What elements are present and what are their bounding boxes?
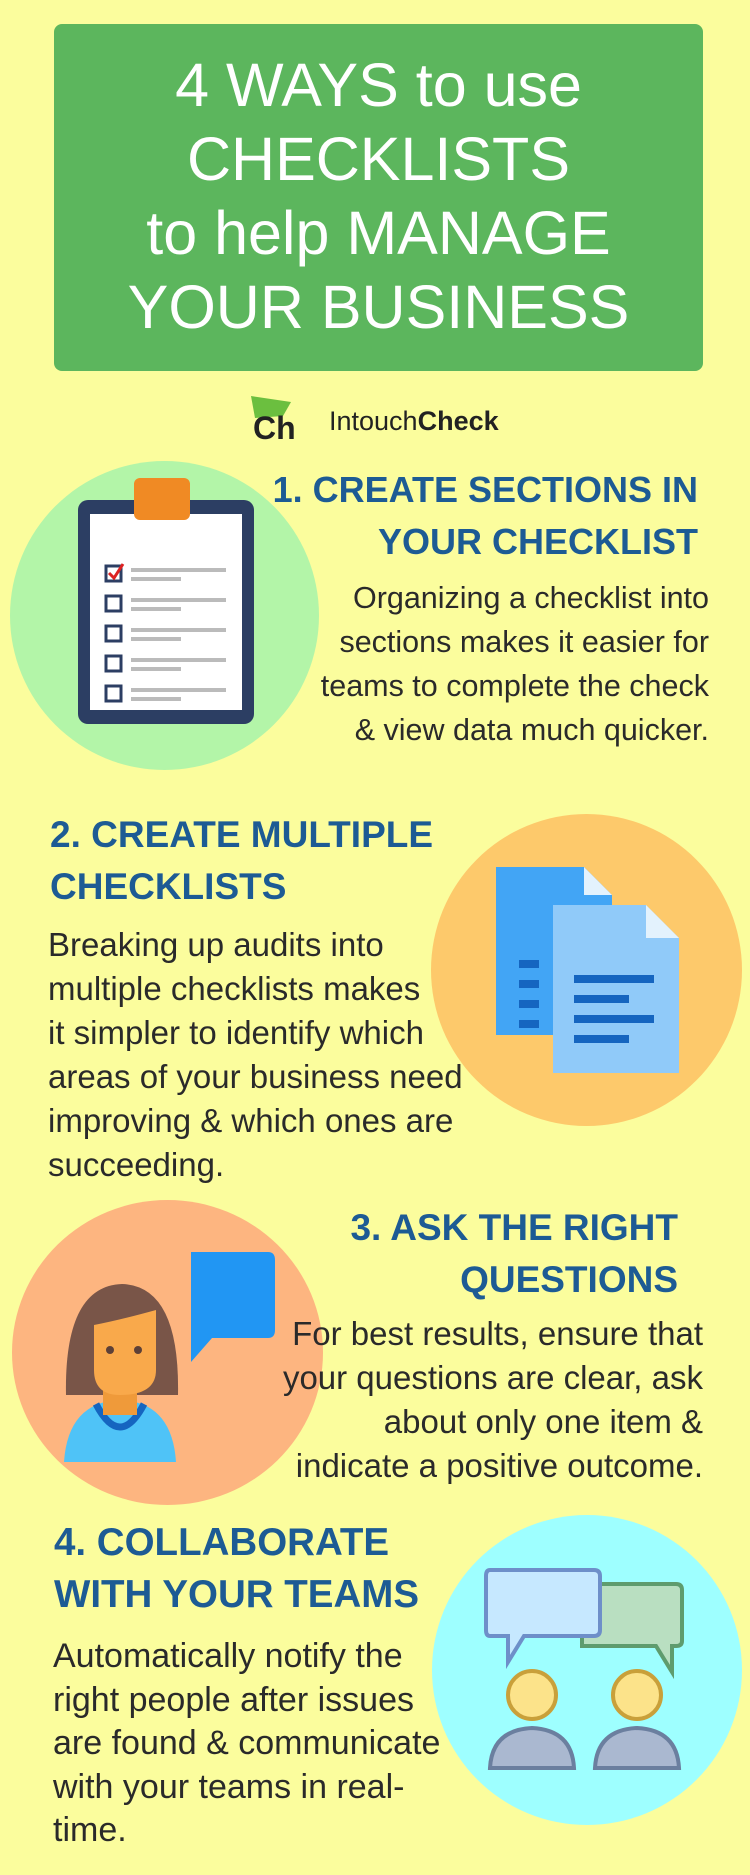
icon: clipboard xyxy=(78,478,254,724)
title box xyxy=(54,24,703,371)
circle 3 xyxy=(12,1200,323,1505)
heading 2: 2. CREATE MULTIPLE xyxy=(50,814,433,855)
circle 4 xyxy=(432,1515,742,1825)
body 3 xyxy=(283,1315,703,1484)
body 2 xyxy=(48,926,463,1183)
heading 2: CHECKLISTS xyxy=(50,866,286,907)
logo: IntouchCheck xyxy=(329,406,499,436)
body 4 xyxy=(53,1637,440,1849)
body 3: For best results, ensure that xyxy=(292,1315,703,1352)
heading 3: 3. ASK THE RIGHT xyxy=(350,1207,678,1248)
heading 4 xyxy=(54,1521,419,1616)
title text: 4 WAYS to use xyxy=(175,51,582,119)
heading 1: YOUR CHECKLIST xyxy=(378,521,698,562)
body 1 xyxy=(321,581,709,747)
logo xyxy=(251,396,499,444)
heading 1 xyxy=(273,469,698,562)
icon: person with speech bubble xyxy=(64,1252,275,1462)
body 2: areas of your business need xyxy=(48,1058,463,1095)
body 4: are found & communicate xyxy=(53,1724,440,1762)
title text: to help MANAGE xyxy=(146,199,611,267)
title text: CHECKLISTS xyxy=(187,125,570,193)
heading 4: WITH YOUR TEAMS xyxy=(54,1573,419,1616)
heading 1: 1. CREATE SECTIONS IN xyxy=(273,469,698,510)
title text: YOUR BUSINESS xyxy=(128,273,629,341)
heading 3 xyxy=(350,1207,678,1300)
heading 4: 4. COLLABORATE xyxy=(54,1521,389,1564)
body 2: multiple checklists makes xyxy=(48,970,420,1007)
body 2: improving & which ones are xyxy=(48,1102,453,1139)
heading 2 xyxy=(50,814,433,907)
title text xyxy=(128,51,629,341)
body 2: Breaking up audits into xyxy=(48,926,384,963)
body 1: sections makes it easier for xyxy=(339,625,709,659)
body 1: teams to complete the check xyxy=(321,669,709,703)
body 3: indicate a positive outcome. xyxy=(296,1447,703,1484)
circle 2 xyxy=(431,814,742,1126)
icon: documents xyxy=(496,867,679,1073)
body 3: your questions are clear, ask xyxy=(283,1359,703,1396)
body 1: Organizing a checklist into xyxy=(353,581,709,615)
body 1: & view data much quicker. xyxy=(355,713,709,747)
body 4: with your teams in real- xyxy=(53,1768,404,1806)
body 4: Automatically notify the xyxy=(53,1637,403,1675)
body 4: time. xyxy=(53,1811,127,1849)
circle 1 xyxy=(10,461,319,770)
icon: collaboration xyxy=(484,1568,684,1770)
body 2: succeeding. xyxy=(48,1146,224,1183)
body 4: right people after issues xyxy=(53,1680,414,1718)
body 2: it simpler to identify which xyxy=(48,1014,424,1051)
heading 3: QUESTIONS xyxy=(460,1259,678,1300)
body 3: about only one item & xyxy=(384,1403,703,1440)
